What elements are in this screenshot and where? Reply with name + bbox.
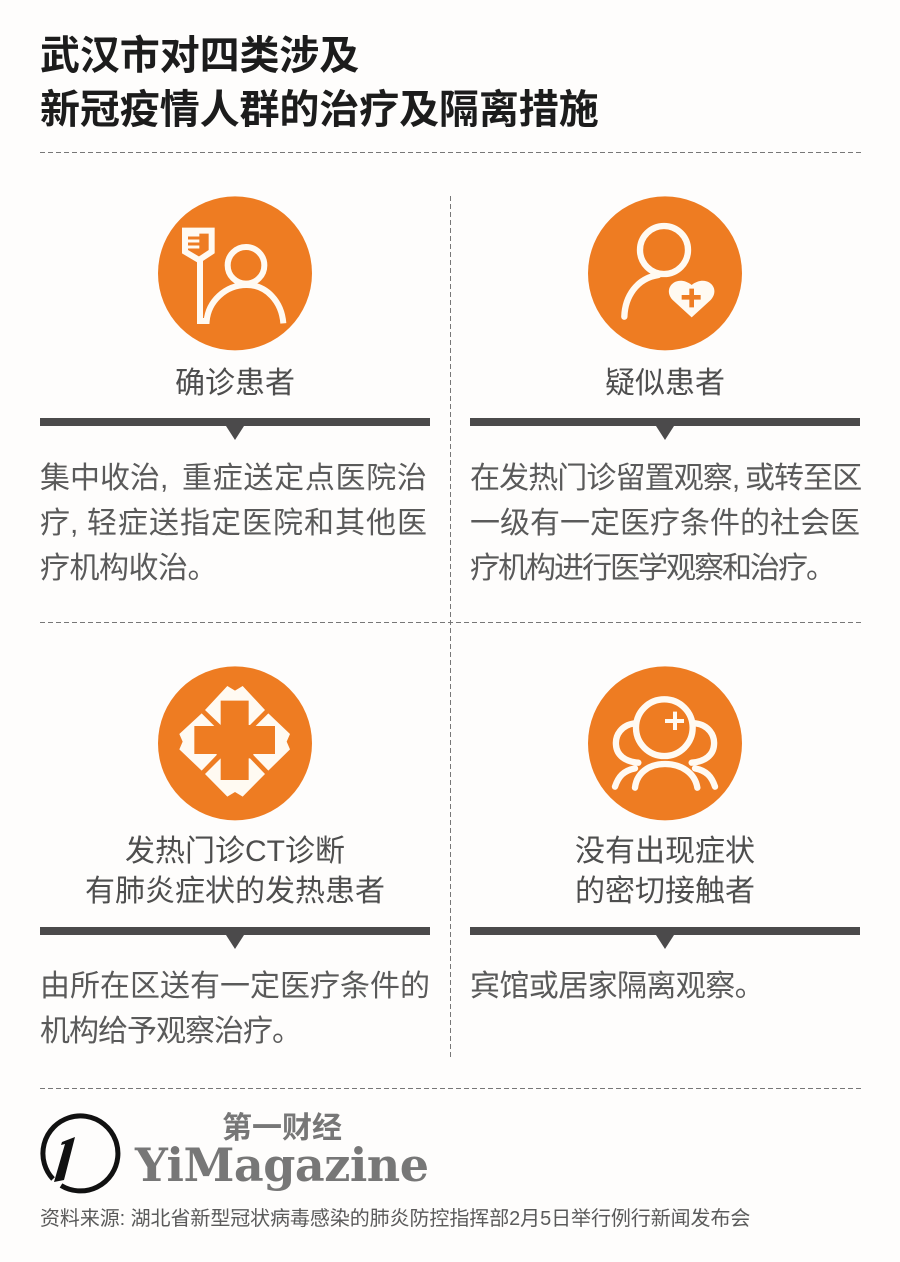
- title: 新冠疫情人群的治疗及隔离措施: [40, 88, 599, 132]
- text: treatment for close contacts: 宾馆或居家隔离观察。: [470, 970, 764, 1003]
- panel: suspected patients: [470, 196, 861, 585]
- label: close contacts: [575, 835, 755, 908]
- icon: medical cross: [158, 666, 312, 820]
- logo wordmark: YiMagazine: [135, 1138, 429, 1192]
- text: treatment for confirmed patients: [40, 462, 428, 585]
- icon: IV drip and person: [158, 196, 312, 350]
- text: treatment for suspected patients: 一级有一定医疗条件的社会医: [470, 507, 860, 540]
- pointer triangle: [656, 426, 674, 440]
- label: close contacts: 没有出现症状: [575, 835, 755, 868]
- icon: person with heart: [588, 196, 742, 350]
- pointer triangle: [226, 935, 244, 949]
- panel: fever clinic CT patients: [40, 666, 430, 1048]
- text: treatment for suspected patients: 在发热门诊留置观察,或转至区: [470, 462, 861, 495]
- title: [40, 34, 599, 132]
- pointer triangle: [226, 426, 244, 440]
- divider bar: [40, 418, 430, 426]
- text: treatment for fever patients: 由所在区送有一定医疗条件的: [40, 970, 430, 1003]
- label: suspected patients: 疑似患者: [605, 367, 725, 400]
- label: fever clinic CT patients: 发热门诊CT诊断: [125, 835, 345, 868]
- logo mark: [40, 1113, 120, 1194]
- logo Chinese name: 第一财经: [222, 1112, 342, 1145]
- divider bar: [470, 927, 860, 935]
- label: fever clinic CT patients: [85, 835, 385, 908]
- panel: confirmed patients: [40, 196, 430, 585]
- text: treatment for confirmed patients: 集中收治, 重症送定点医院治: [40, 462, 428, 495]
- source text: 资料来源: 湖北省新型冠状病毒感染的肺炎防控指挥部2月5日举行例行新闻发布会: [40, 1208, 750, 1230]
- text: treatment for suspected patients: [470, 462, 861, 585]
- logo: YiMagazine: [40, 1112, 429, 1194]
- text: treatment for suspected patients: 疗机构进行医学观察和治疗。: [470, 552, 834, 585]
- text: treatment for confirmed patients: 疗机构收治。: [40, 552, 217, 585]
- pointer triangle: [656, 935, 674, 949]
- title: 武汉市对四类涉及: [40, 34, 359, 78]
- text: treatment for fever patients: [40, 970, 430, 1048]
- divider bar: [470, 418, 860, 426]
- text: treatment for fever patients: 机构给予观察治疗。: [40, 1015, 301, 1048]
- label: confirmed patients: 确诊患者: [175, 367, 295, 400]
- label: fever clinic CT patients: 有肺炎症状的发热患者: [85, 875, 385, 908]
- divider bar: [40, 927, 430, 935]
- panel: close contacts: [470, 666, 860, 1003]
- label: close contacts: 的密切接触者: [575, 875, 755, 908]
- icon: group of people: [588, 666, 742, 820]
- text: treatment for confirmed patients: 疗, 轻症送指定医院和其他医: [40, 507, 428, 540]
